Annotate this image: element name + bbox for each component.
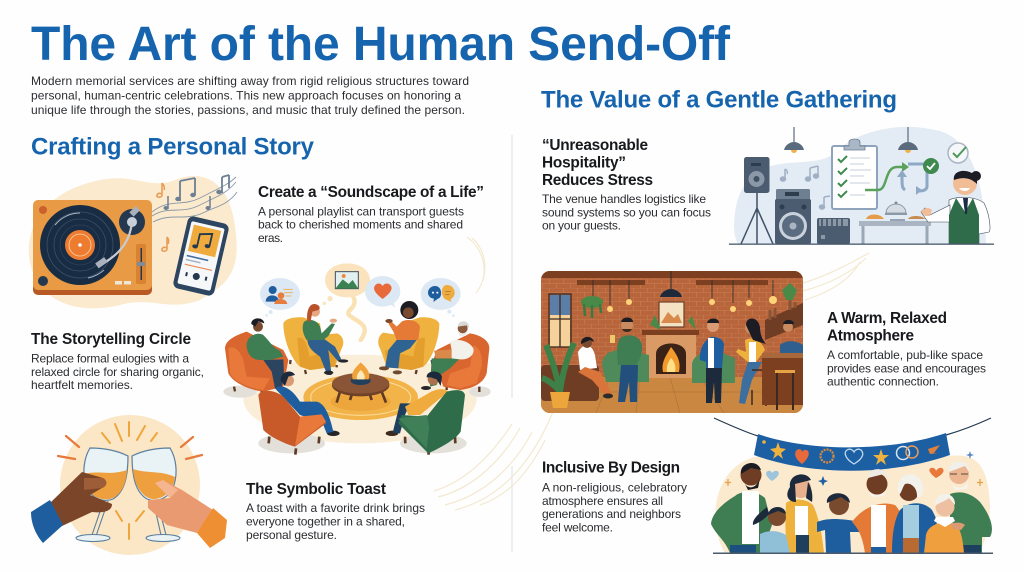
text: inclusive by design: A non-religious, celebratory	[542, 481, 687, 495]
small accents	[725, 451, 983, 486]
woman on stool	[736, 318, 768, 406]
man with beer	[610, 318, 642, 402]
text: warm relaxed atmosphere: A Warm, Relaxed	[827, 310, 947, 327]
glass: right	[132, 448, 180, 542]
heading: the value of a gentle gathering: The Value of a Gentle Gathering	[541, 86, 897, 114]
text: storytelling circle: heartfelt memories.	[31, 378, 133, 392]
intro text: Modern memorial services are shifting away from rigid religious structures toward	[31, 74, 469, 88]
floor	[541, 377, 803, 413]
text: symbolic toast: A toast with a favorite drink brings	[246, 501, 425, 515]
person: man front left	[275, 371, 340, 436]
person: boy	[817, 493, 861, 553]
text: inclusive by design	[542, 460, 687, 534]
glass: left	[76, 448, 128, 542]
bubble: heart	[365, 276, 400, 307]
mantel and fireplace	[642, 315, 699, 378]
text: warm relaxed atmosphere	[827, 310, 986, 388]
green arrow and cycle	[865, 158, 939, 195]
text: inclusive by design: atmosphere ensures all	[542, 494, 663, 508]
text: soundscape of a life: A personal playlist can transport guests	[258, 204, 464, 218]
chair: right orange	[433, 333, 489, 392]
illustration: venue logistics	[729, 127, 994, 245]
person: man in green	[247, 318, 284, 388]
person: older woman in blue	[892, 474, 937, 553]
icon: turntable and phone	[29, 175, 237, 308]
table with fire	[332, 362, 389, 403]
large plant	[542, 343, 574, 408]
text: warm relaxed atmosphere: Atmosphere	[827, 328, 914, 345]
text: storytelling circle: relaxed circle for sharing organic,	[31, 365, 204, 379]
text: symbolic toast: everyone together in a shared,	[246, 514, 405, 528]
illustration: warm pub interior	[541, 271, 803, 413]
text: inclusive by design: generations and neighbors	[542, 507, 681, 521]
person: elderly man	[421, 321, 474, 390]
person: man front right	[386, 371, 448, 436]
text: symbolic toast: The Symbolic Toast	[246, 481, 386, 498]
clipboard checklist	[832, 139, 877, 209]
check badge	[948, 143, 968, 163]
speaker on tripod	[741, 157, 773, 244]
text: unreasonable hospitality: sound systems so you can focus	[542, 205, 711, 219]
sofas	[541, 350, 735, 401]
bubble: chat	[421, 278, 461, 317]
chair: front right green	[398, 390, 465, 455]
person: older man in orange	[852, 469, 905, 553]
person: bearded man	[711, 463, 772, 553]
chair: front left orange	[258, 391, 326, 455]
bubble: people	[260, 278, 300, 317]
host	[921, 171, 990, 244]
person: girl	[753, 507, 790, 553]
amp stack	[775, 189, 811, 244]
illustration: wine toast	[31, 415, 227, 555]
person: woman in green	[303, 304, 348, 375]
text: inclusive by design: feel welcome.	[542, 520, 613, 534]
music notes	[780, 166, 830, 209]
mixer	[817, 218, 850, 244]
text: unreasonable hospitality: “Unreasonable	[542, 137, 648, 154]
man in blue jacket	[700, 318, 724, 403]
text: soundscape of a life: eras.	[258, 231, 283, 245]
person: older man in green	[949, 462, 992, 553]
illustration: storytelling circle	[223, 263, 491, 455]
person: elderly woman in yellow	[924, 494, 965, 553]
text: unreasonable hospitality: Reduces Stress	[542, 172, 653, 189]
illustration: inclusive group with banner	[711, 418, 993, 554]
text: warm relaxed atmosphere: A comfortable, pub-like space	[827, 348, 983, 362]
serving table	[859, 202, 931, 244]
intro text: personal, human-centric celebrations. This new approach focuses on honoring a	[31, 88, 461, 102]
banner	[714, 418, 991, 471]
pendant lamp and painting	[659, 271, 684, 327]
text: soundscape of a life: Create a “Soundscape of a Life”	[258, 184, 484, 201]
chair: back left yellow	[283, 317, 343, 374]
bubble: picture	[323, 263, 370, 305]
text: inclusive by design: Inclusive By Design	[542, 460, 680, 477]
text: soundscape of a life	[258, 184, 484, 245]
chair: back right yellow	[378, 317, 439, 374]
text: storytelling circle: The Storytelling Circle	[31, 331, 191, 348]
intro text: unique life through the stories, passions, and music that truly defined the person.	[31, 103, 465, 117]
text: warm relaxed atmosphere: authentic connection.	[827, 374, 939, 388]
hand: left	[31, 472, 112, 543]
text: unreasonable hospitality	[542, 137, 711, 233]
window	[549, 294, 571, 347]
chair: left orange	[225, 332, 288, 393]
text: storytelling circle: Replace formal eulogies with a	[31, 352, 189, 366]
heading: crafting a personal story: Crafting a Personal Story	[31, 134, 315, 160]
text: unreasonable hospitality: Hospitality”	[542, 154, 626, 172]
hanging plant and string lights	[581, 280, 777, 318]
title: The Art of the Human Send-Off	[31, 18, 731, 71]
text: soundscape of a life: back to cherished moments and shared	[258, 218, 463, 232]
hand: right	[148, 480, 227, 548]
smoke wisp	[348, 295, 365, 340]
text: unreasonable hospitality: The venue handles logistics like	[542, 192, 706, 206]
text: unreasonable hospitality: on your guests.	[542, 219, 621, 233]
bar, shelves and barman	[762, 283, 803, 410]
pendant lamps	[784, 127, 918, 153]
text: symbolic toast	[246, 481, 425, 542]
woman seated	[578, 337, 613, 398]
person: woman in yellow	[785, 474, 824, 553]
person: woman in orange	[379, 301, 420, 374]
intro text	[31, 74, 469, 117]
text: warm relaxed atmosphere: provides ease and encourages	[827, 361, 986, 375]
text: storytelling circle	[31, 331, 204, 392]
text: symbolic toast: personal gesture.	[246, 528, 337, 542]
